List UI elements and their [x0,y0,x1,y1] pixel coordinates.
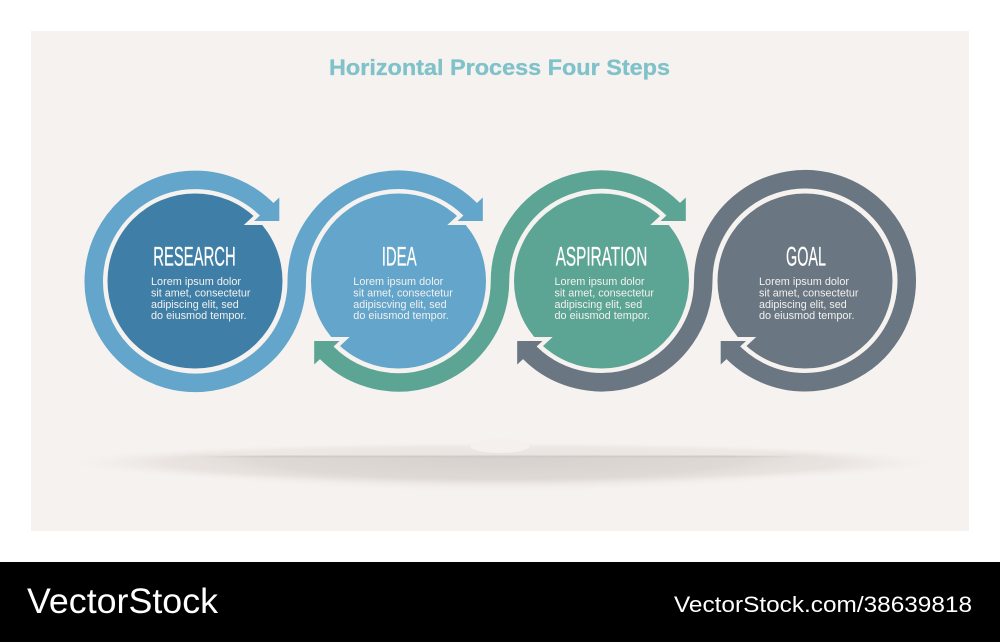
step discs with arrowhead outlines [108,194,892,368]
step text: research: Lorem ipsum dolor [151,276,241,288]
step text: goal: GOAL [786,241,826,271]
step text: research: sit amet, consectetur [151,287,251,299]
background panel [31,31,969,531]
step text: goal [759,241,859,322]
step text: aspiration: Lorem ipsum dolor [554,276,645,288]
step text: idea: adipiscving elit, sed [353,299,447,311]
step text: idea: do eiusmod tempor. [353,310,449,322]
arrow band: green [314,180,686,382]
step text: aspiration: sit amet, consectetur [554,287,654,299]
step text: aspiration: ASPIRATION [556,241,647,271]
arrow band: slate [517,179,907,382]
footer bar: VectorStock.com/38639818 [674,592,972,617]
step text: idea [353,241,453,322]
step text: aspiration: do eiusmod tempor. [554,310,650,322]
step text: idea: IDEA [382,241,417,271]
step text: research [151,241,251,322]
step text: research: do eiusmod tempor. [151,310,246,322]
title: Horizontal Process Four Steps [329,55,670,80]
footer bar: VectorStock [27,582,219,621]
step text: goal: adipiscing elit, sed [759,299,847,311]
step text: aspiration [554,241,654,322]
step text: goal: sit amet, consectetur [759,287,859,299]
step text: goal: Lorem ipsum dolor [759,276,849,288]
step text: idea: sit amet, consectetur [353,287,453,299]
arrow band: blue [94,180,483,383]
step text: research: adipiscing elit, sed [151,299,239,311]
footer bar [0,562,1000,642]
ground shadow [131,446,874,485]
step text: aspiration: adipiscing elit, sed [554,299,642,311]
step text: idea: Lorem ipsum dolor [353,276,443,288]
step text: goal: do eiusmod tempor. [759,310,854,322]
step text: research: RESEARCH [153,241,236,271]
